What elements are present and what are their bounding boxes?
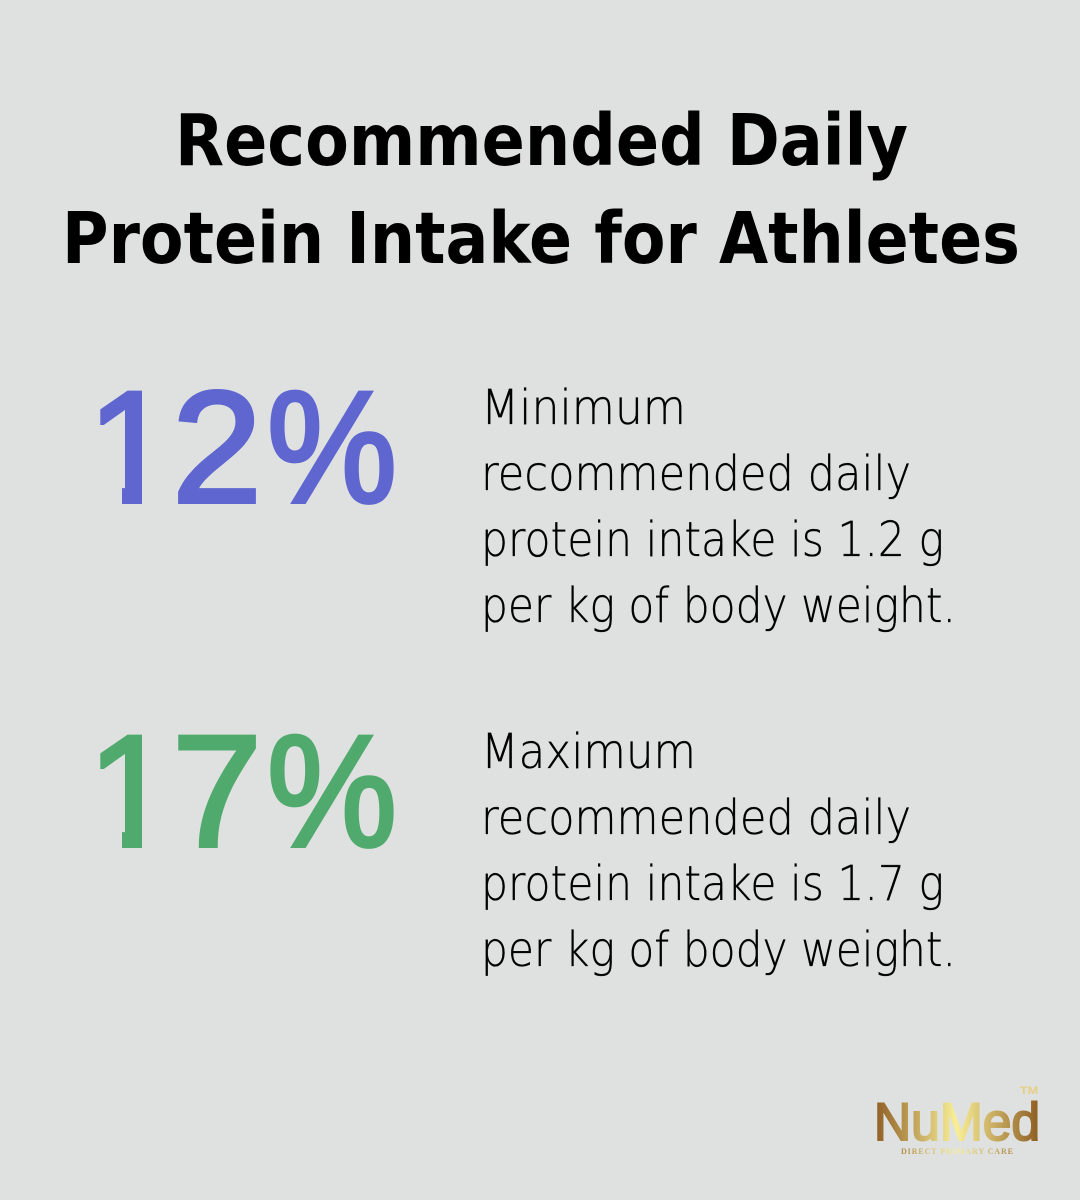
number: 12%: 1	[87, 358, 175, 536]
number: 17%: 1	[87, 702, 175, 880]
text: maximum intake description: recommended daily	[481, 790, 911, 846]
number: 12%: %	[267, 358, 397, 536]
text: maximum intake description: Maximum	[481, 724, 696, 780]
text: minimum intake description: recommended daily	[481, 446, 911, 502]
stat: 12% minimum	[100, 387, 950, 632]
text: minimum intake description	[481, 380, 956, 634]
logo: NuMed: DIRECT PRIMARY CARE	[901, 1147, 1013, 1156]
stat: 17% maximum	[100, 731, 950, 976]
number: 17%	[100, 734, 394, 849]
logo: NuMed: TM	[1020, 1085, 1038, 1097]
title	[62, 99, 1020, 280]
text: minimum intake description: per kg of body weight.	[481, 578, 956, 634]
text: maximum intake description: protein intake is 1.7 g	[481, 856, 944, 912]
text: maximum intake description: per kg of body weight.	[481, 922, 956, 978]
number: 12%: 2	[172, 358, 262, 536]
logo: NuMed: NuMed	[874, 1093, 1040, 1152]
text: minimum intake description: protein intake is 1.2 g	[481, 512, 944, 568]
number: 17%: %	[267, 702, 397, 880]
text: minimum intake description: Minimum	[481, 380, 686, 436]
text: maximum intake description	[481, 724, 956, 978]
title: Recommended Daily	[175, 99, 908, 182]
number: 12%	[100, 389, 394, 505]
number: 17%: 7	[172, 702, 262, 880]
